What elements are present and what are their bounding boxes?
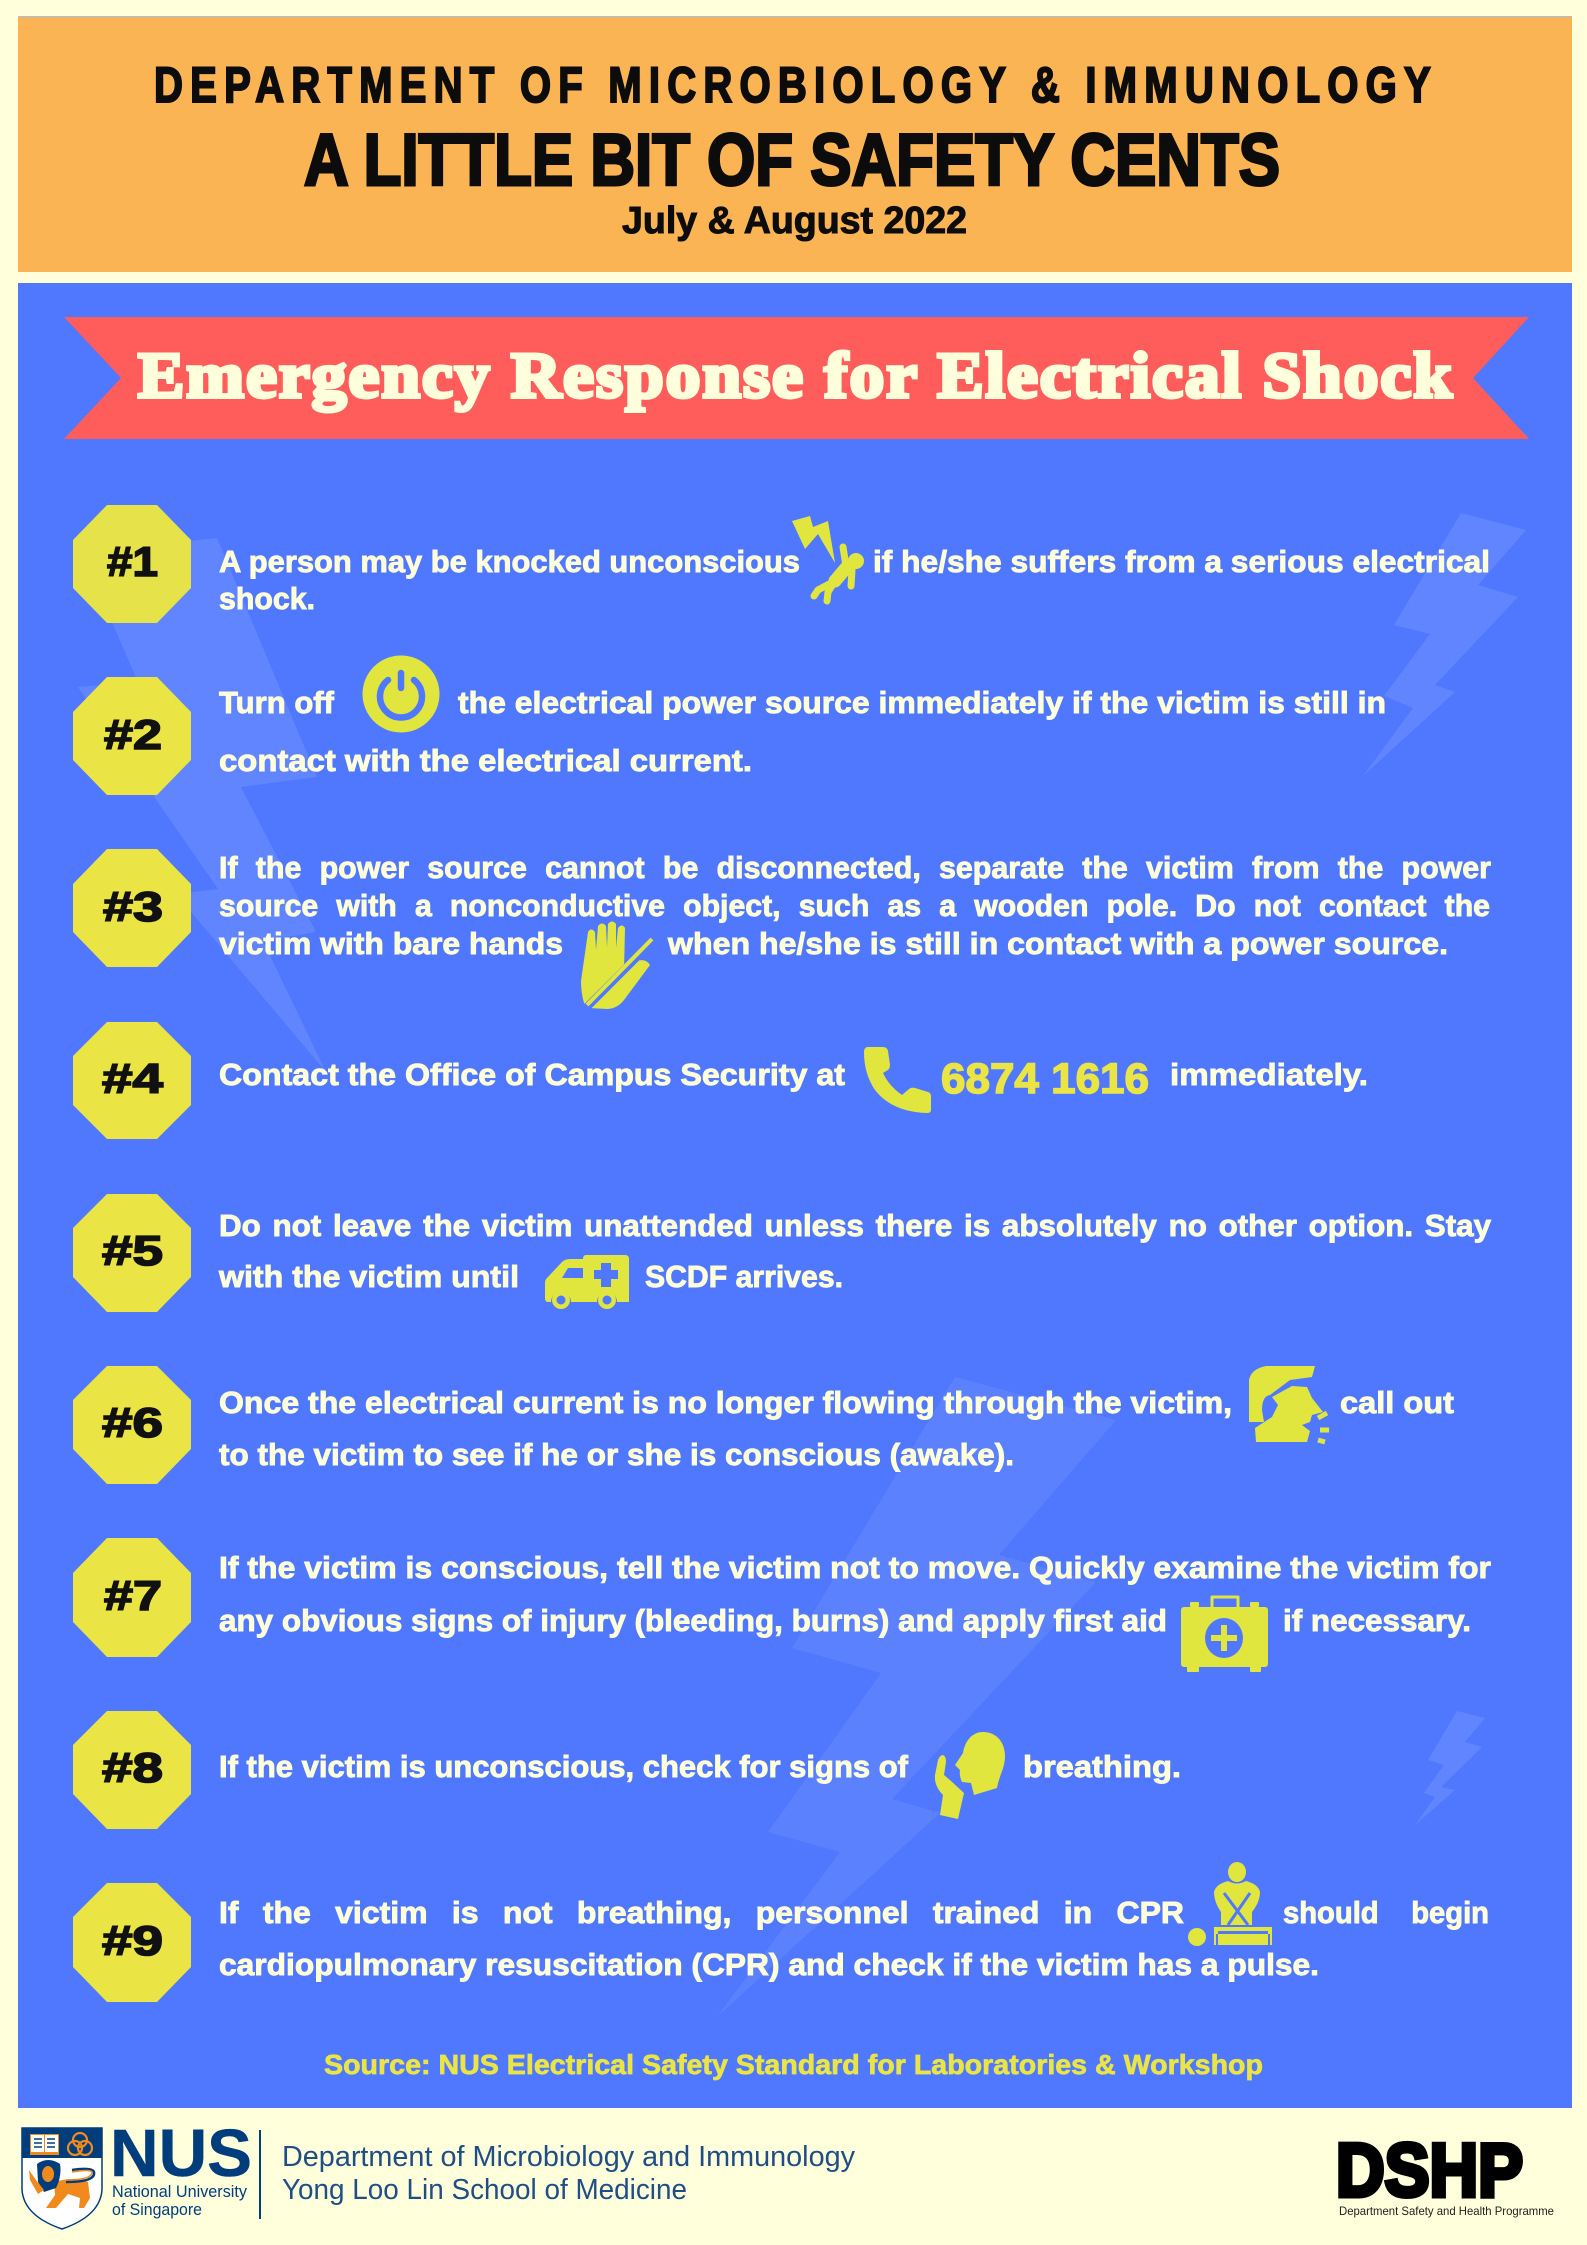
step 1 badge: #1 xyxy=(107,538,158,585)
background lightning bolts xyxy=(78,513,1526,2017)
step 4 text: Contact the Office of Campus Security at xyxy=(219,1057,845,1092)
step 4 text xyxy=(219,1057,1368,1092)
icon: crossed-out hand xyxy=(581,922,658,1009)
step 3 badge: #3 xyxy=(103,883,163,930)
step 6 xyxy=(73,1366,1454,1484)
step 1 text: if he/she suffers from a serious electrical xyxy=(873,544,1490,579)
step 7 text: If the victim is conscious, tell the victim not to move. Quickly examine the victim for xyxy=(219,1550,1491,1585)
step 6 text: call out xyxy=(1340,1385,1454,1420)
step 6 badge xyxy=(73,1366,191,1484)
step 3 text: source with a nonconductive object, such as a wooden pole. Do not contact the xyxy=(219,888,1490,923)
step 5 xyxy=(73,1194,1492,1312)
step 1 badge xyxy=(73,505,191,623)
step 5 text: with the victim until xyxy=(218,1259,519,1294)
step 2 text: Turn off xyxy=(219,685,335,720)
step 2 xyxy=(73,656,1386,795)
source line: Source: NUS Electrical Safety Standard for Laboratories & Workshop xyxy=(324,2049,1263,2080)
date: July & August 2022 xyxy=(622,200,967,242)
step 9 text xyxy=(219,1895,1489,1982)
step 7 badge: #7 xyxy=(104,1572,162,1619)
university name: National University xyxy=(112,2182,247,2201)
step 8 text: If the victim is unconscious, check for signs of xyxy=(219,1749,909,1784)
main blue panel xyxy=(18,283,1572,2108)
icon: head with hand checking breath xyxy=(935,1732,1005,1819)
step 2 badge: #2 xyxy=(104,711,162,758)
step 5 text xyxy=(218,1208,1492,1294)
step 3 text: when he/she is still in contact with a power source. xyxy=(667,926,1448,961)
step 6 text: Once the electrical current is no longer flowing through the victim, xyxy=(219,1385,1232,1420)
step 3 xyxy=(73,849,1491,1009)
NUS crest xyxy=(22,2128,102,2229)
step 5 text: Do not leave the victim unattended unless there is absolutely no other option. Stay xyxy=(219,1208,1492,1243)
step 4 text: immediately. xyxy=(1170,1057,1368,1092)
department name: Department of Microbiology and Immunology xyxy=(282,2141,855,2173)
step 7 text xyxy=(219,1550,1491,1638)
icon: first aid kit xyxy=(1181,1597,1268,1672)
department name xyxy=(282,2141,855,2206)
step 9 badge: #9 xyxy=(102,1917,163,1964)
step 8 badge xyxy=(73,1711,191,1829)
department name: Yong Loo Lin School of Medicine xyxy=(282,2174,687,2206)
DSHP logo: DSHP xyxy=(1336,2128,1523,2212)
step 6 badge: #6 xyxy=(102,1399,163,1446)
ribbon heading: Emergency Response for Electrical Shock xyxy=(138,340,1454,412)
icon: CPR xyxy=(1188,1862,1272,1946)
step 8 xyxy=(73,1711,1181,1829)
step 7 text: if necessary. xyxy=(1283,1603,1471,1638)
step 3 text xyxy=(219,850,1491,961)
step 9 text: cardiopulmonary resuscitation (CPR) and check if the victim has a pulse. xyxy=(219,1947,1319,1982)
step 5 text: SCDF arrives. xyxy=(645,1259,843,1294)
step 1 xyxy=(73,505,1490,623)
step 2 text: the electrical power source immediately if the victim is still in xyxy=(458,685,1386,720)
step 1 text xyxy=(219,544,1490,616)
step 3 text: If the power source cannot be disconnected, separate the victim from the power xyxy=(219,850,1491,885)
step 8 badge: #8 xyxy=(102,1744,163,1791)
step 4 badge xyxy=(73,1022,191,1139)
main title: A LITTLE BIT OF SAFETY CENTS xyxy=(304,120,1280,201)
step 9 text: If the victim is not breathing, personnel trained in CPR xyxy=(219,1895,1184,1930)
icon: person calling out xyxy=(1249,1366,1329,1442)
university name xyxy=(112,2182,247,2219)
step 4 badge: #4 xyxy=(102,1055,164,1102)
step 3 badge xyxy=(73,849,191,967)
step 7 badge xyxy=(73,1538,191,1657)
DSHP caption: Department Safety and Health Programme xyxy=(1339,2204,1554,2218)
step 6 text xyxy=(219,1385,1454,1472)
step 4 xyxy=(73,1022,1368,1139)
step 2 text: contact with the electrical current. xyxy=(219,743,752,778)
step 9 xyxy=(73,1862,1489,2002)
icon: ambulance xyxy=(545,1255,629,1309)
phone number: 6874 1616 xyxy=(941,1055,1149,1103)
icon: telephone xyxy=(864,1047,931,1113)
step 9 badge xyxy=(73,1883,191,2002)
step 7 text: any obvious signs of injury (bleeding, burns) and apply first aid xyxy=(219,1603,1167,1638)
NUS logo xyxy=(22,2116,855,2229)
step 2 text xyxy=(219,685,1386,778)
NUS wordmark: NUS xyxy=(110,2116,252,2191)
step 6 text: to the victim to see if he or she is conscious (awake). xyxy=(219,1437,1014,1472)
university name: of Singapore xyxy=(112,2200,202,2219)
step 7 xyxy=(73,1538,1491,1672)
header panel xyxy=(18,17,1572,272)
step 3 text: victim with bare hands xyxy=(219,926,563,961)
step 5 badge: #5 xyxy=(102,1227,163,1274)
icon: power button xyxy=(362,656,440,732)
step 2 badge xyxy=(73,677,191,795)
step 1 text: A person may be knocked unconscious xyxy=(219,544,800,579)
title ribbon xyxy=(64,317,1529,439)
step 5 badge xyxy=(73,1194,191,1312)
step 8 text: breathing. xyxy=(1023,1749,1181,1784)
step 1 text: shock. xyxy=(219,581,315,616)
icon: falling shocked person xyxy=(792,516,864,601)
step 9 text: should begin xyxy=(1283,1895,1489,1930)
